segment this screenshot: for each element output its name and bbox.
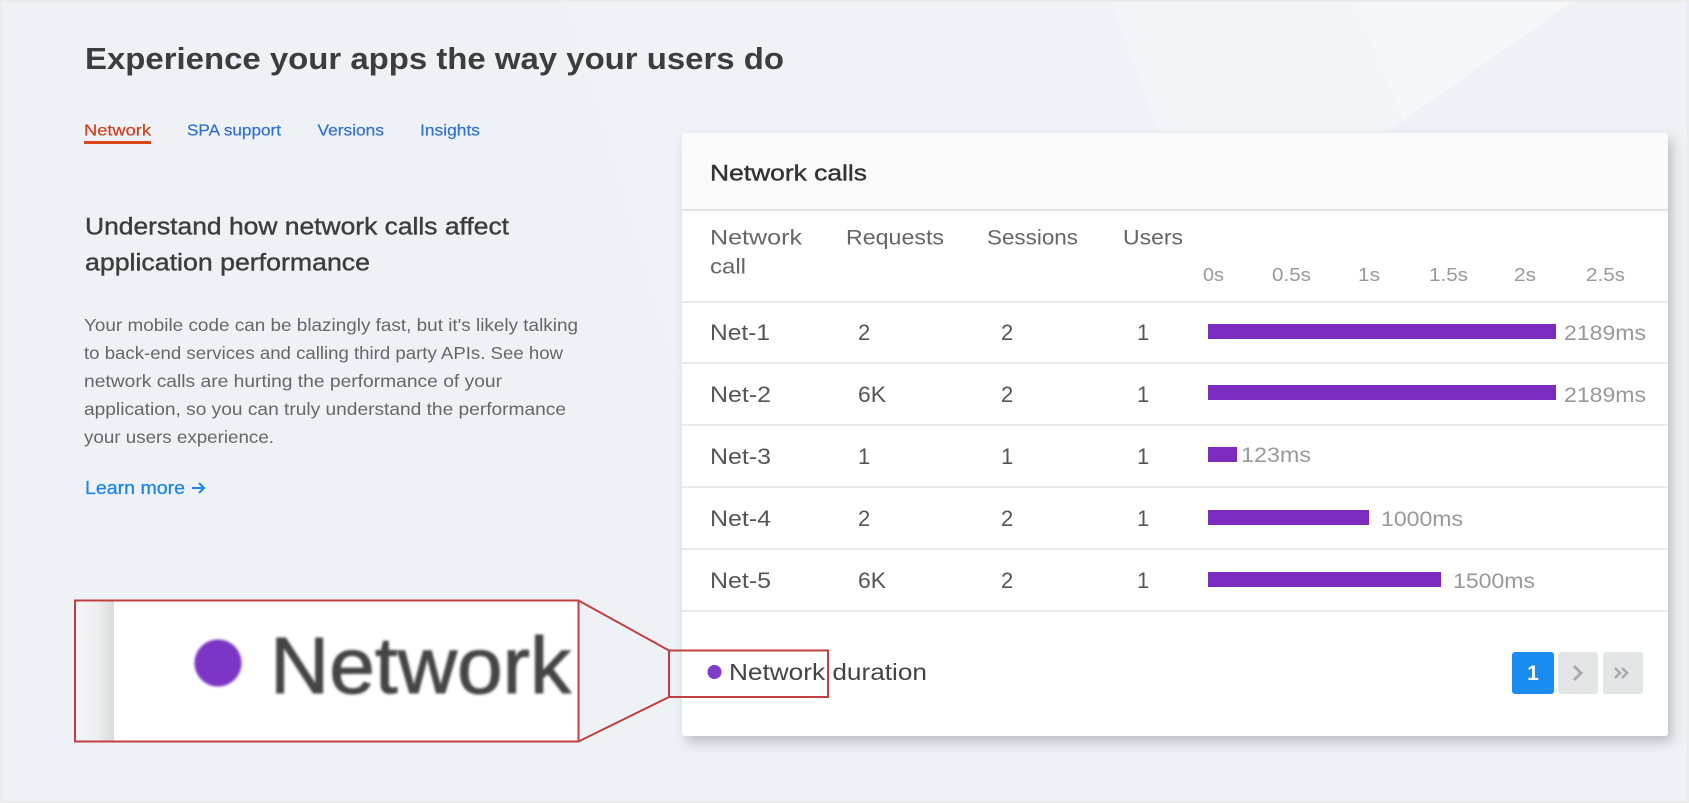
row: Net-5: 2 bbox=[1001, 568, 1013, 593]
body text: your users experience. bbox=[84, 427, 274, 447]
time axis: 0s bbox=[1203, 265, 1224, 285]
icon: arrow bbox=[192, 483, 204, 493]
row: Net-4: 2 bbox=[858, 506, 870, 531]
body text: Your mobile code can be blazingly fast, but it's likely talking bbox=[84, 315, 578, 335]
row: Net-5: 1 bbox=[1137, 568, 1149, 593]
tab: Network bbox=[84, 122, 152, 144]
table header: Sessions bbox=[987, 226, 1078, 250]
row: Net-3: 1 bbox=[1137, 444, 1149, 469]
row: Net-4 bbox=[710, 506, 1463, 531]
table header: Network bbox=[710, 226, 803, 250]
row: Net-3: Net-3 bbox=[710, 444, 771, 469]
table header: Users bbox=[1123, 226, 1183, 250]
row: Net-3: 1 bbox=[858, 444, 870, 469]
time axis bbox=[1203, 265, 1625, 285]
row: Net-1: 2 bbox=[858, 320, 870, 345]
row: Net-2: 6K bbox=[858, 382, 886, 407]
page 1 button: 1 bbox=[1527, 662, 1539, 685]
time axis: 1s bbox=[1358, 265, 1380, 285]
tab: Versions: Versions bbox=[318, 122, 384, 140]
row: Net-1 bbox=[710, 320, 1646, 345]
time axis: 2.5s bbox=[1586, 265, 1625, 285]
card header: Network calls bbox=[710, 160, 867, 186]
row: Net-4: 1000ms bbox=[1381, 508, 1463, 531]
row: Net-3: 1 bbox=[1001, 444, 1013, 469]
row: Net-2: 1 bbox=[1137, 382, 1149, 407]
zoomed dot bbox=[194, 640, 242, 686]
tab: Network: Network bbox=[84, 122, 152, 140]
time axis: 0.5s bbox=[1272, 265, 1311, 285]
tab: SPA support: SPA support bbox=[187, 122, 282, 140]
row: Net-1: 1 bbox=[1137, 320, 1149, 345]
time axis: 1.5s bbox=[1429, 265, 1468, 285]
panel: network calls card bbox=[682, 133, 1668, 736]
row: Net-4: 1 bbox=[1137, 506, 1149, 531]
row: Net-5: Net-5 bbox=[710, 568, 771, 593]
body text bbox=[84, 315, 578, 447]
row: Net-4: 2 bbox=[1001, 506, 1013, 531]
row: Net-5: 6K bbox=[858, 568, 886, 593]
row: Net-2 bbox=[710, 382, 1646, 407]
body text: network calls are hurting the performance of your bbox=[84, 371, 502, 391]
body text: application, so you can truly understand the performance bbox=[84, 399, 566, 419]
heading: network calls: Understand how network calls affect bbox=[85, 214, 509, 240]
row: Net-3 bbox=[710, 444, 1311, 469]
time axis: 2s bbox=[1514, 265, 1536, 285]
heading: network calls: application performance bbox=[85, 250, 370, 276]
learn more link: Learn more bbox=[85, 478, 185, 498]
body text: to back-end services and calling third party APIs. See how bbox=[84, 343, 563, 363]
next button bbox=[1558, 652, 1598, 694]
card header bbox=[682, 133, 1668, 211]
row: Net-1: 2 bbox=[1001, 320, 1013, 345]
row: Net-2: 2 bbox=[1001, 382, 1013, 407]
tab: Insights: Insights bbox=[420, 122, 480, 140]
row: Net-3: 123ms bbox=[1241, 444, 1311, 467]
row: Net-1: 2189ms bbox=[1564, 322, 1646, 345]
table header bbox=[710, 226, 1183, 278]
zoomed text: Network bbox=[270, 621, 572, 710]
row: Net-5 bbox=[710, 568, 1535, 593]
tabs bbox=[84, 122, 480, 144]
table header: call bbox=[710, 256, 746, 278]
row: Net-4: Net-4 bbox=[710, 506, 771, 531]
row: Net-5: 1500ms bbox=[1453, 570, 1535, 593]
callout frame and connectors bbox=[75, 600, 828, 742]
pagination bbox=[1512, 652, 1643, 694]
heading: network calls bbox=[85, 214, 509, 276]
last button bbox=[1603, 652, 1643, 694]
callout: zoomed legend bbox=[75, 600, 828, 742]
title: Experience your apps the way your users do bbox=[85, 41, 784, 76]
row: Net-2: Net-2 bbox=[710, 382, 771, 407]
row: Net-2: 2189ms bbox=[1564, 384, 1646, 407]
legend: Network duration bbox=[729, 659, 927, 685]
row: Net-1: Net-1 bbox=[710, 320, 770, 345]
table header: Requests bbox=[846, 226, 944, 250]
